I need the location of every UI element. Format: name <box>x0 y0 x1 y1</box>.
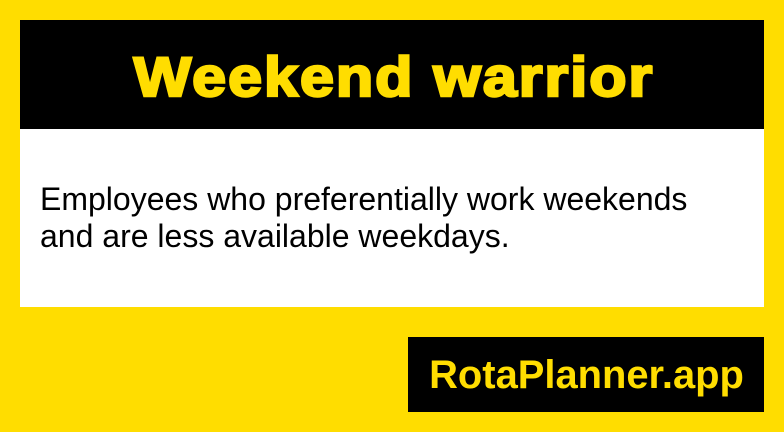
description text: and are less available weekdays. <box>40 218 510 254</box>
title banner <box>20 20 764 129</box>
description panel <box>20 129 764 307</box>
title: Weekend warrior <box>133 46 654 108</box>
brand name: RotaPlanner.app <box>429 353 744 397</box>
description text <box>40 181 687 254</box>
description text: Employees who preferentially work weekends <box>40 181 687 217</box>
brand badge <box>408 337 764 412</box>
